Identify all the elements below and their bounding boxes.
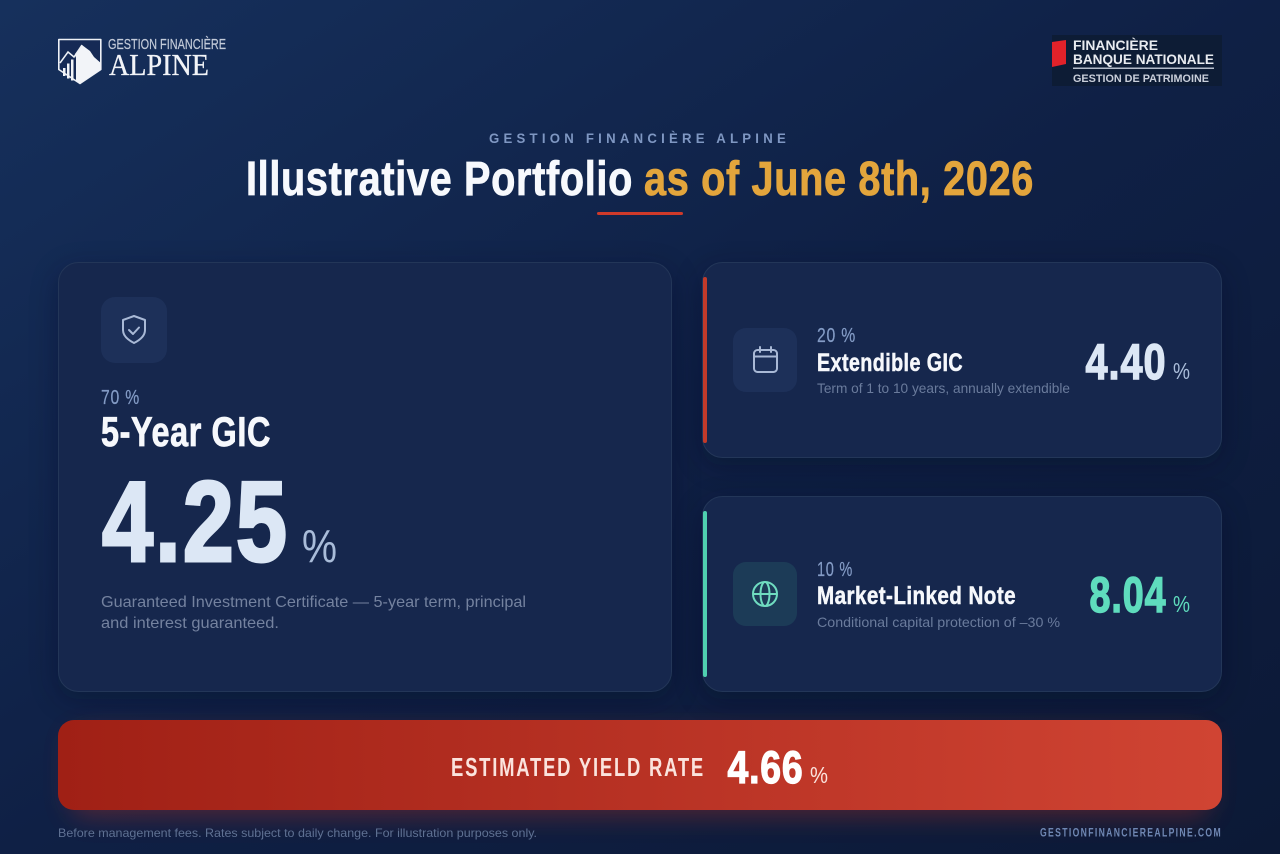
allocation 20 %: 20 %: [817, 325, 856, 347]
icon: shield: [101, 297, 167, 363]
icon: globe: [733, 562, 797, 626]
description: Term of 1 to 10 years, annually extendible: [817, 380, 1070, 396]
rate 4.40 %: %: [1173, 358, 1190, 384]
banner label: ESTIMATED YIELD RATE: [451, 752, 705, 782]
rate 4.40 %: 4.40: [1086, 334, 1166, 390]
banner rate 4.66 %: %: [810, 762, 828, 788]
logo: Financière Banque Nationale: [1052, 35, 1222, 86]
logo: Financière Banque Nationale: BANQUE NATIONALE: [1073, 52, 1214, 67]
rate 4.25 %: 4.25: [102, 459, 289, 586]
title: [246, 153, 1034, 206]
eyebrow: GESTION FINANCIÈRE ALPINE: [489, 130, 790, 146]
logo: Gestion Financière Alpine: [59, 36, 226, 84]
name: Market-Linked Note: Market-Linked Note: [817, 582, 1016, 610]
allocation 10 %: 10 %: [817, 559, 853, 581]
description: Guaranteed Investment Certificate — 5-year term, principal: [101, 594, 526, 611]
logo: Financière Banque Nationale: GESTION DE PATRIMOINE: [1073, 73, 1209, 85]
panel: Extendible GIC: [702, 262, 1222, 458]
panel: Market-Linked Note: [702, 496, 1222, 692]
logo: Gestion Financière Alpine: GESTION FINANCIÈRE: [108, 36, 226, 53]
allocation 70 %: 70 %: [101, 387, 140, 409]
footer disclaimer: Before management fees. Rates subject to daily change. For illustration purposes only.: [58, 826, 537, 840]
name: Extendible GIC: Extendible GIC: [817, 349, 963, 377]
description: Conditional capital protection of –30 %: [817, 614, 1060, 630]
title: as of June 8th, 2026: [644, 153, 1034, 206]
logo: Financière Banque Nationale: FINANCIÈRE: [1073, 38, 1158, 53]
icon: calendar: [733, 328, 797, 392]
title underline: [597, 212, 683, 215]
accent bar teal: [703, 511, 707, 677]
footer website: GESTIONFINANCIEREALPINE.COM: [1040, 828, 1222, 840]
panel: 5-Year GIC: [58, 262, 672, 692]
description: [101, 594, 526, 632]
description: and interest guaranteed.: [101, 615, 279, 632]
rate 8.04 %: 8.04: [1090, 567, 1166, 623]
title: Illustrative Portfolio: [246, 153, 633, 206]
banner rate 4.66 %: 4.66: [728, 742, 804, 793]
rate 4.25 %: %: [302, 520, 337, 572]
logo: Gestion Financière Alpine: ALPINE: [109, 47, 209, 82]
name: 5-Year GIC: 5-Year GIC: [101, 408, 271, 455]
rate 8.04 %: %: [1173, 591, 1190, 617]
banner: estimated yield rate: [58, 720, 1222, 810]
accent bar red: [703, 277, 707, 443]
